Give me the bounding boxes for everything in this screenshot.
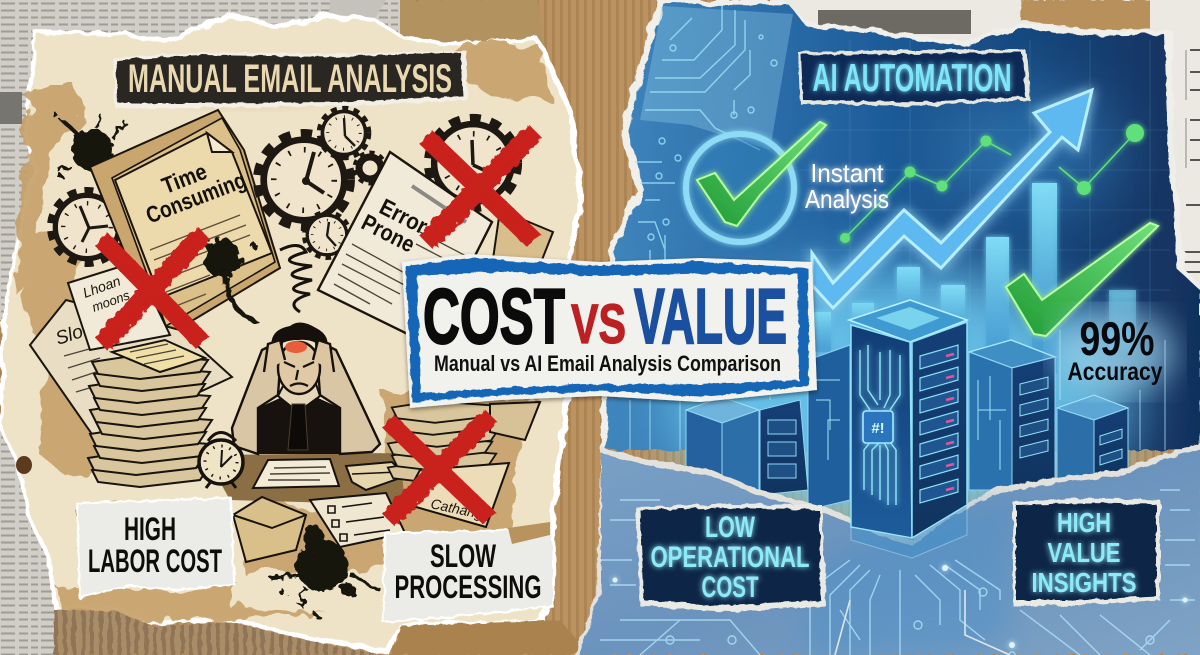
panel: ai upper background xyxy=(600,0,1200,530)
rack rows xyxy=(920,345,958,503)
label: high value insights: VALUE xyxy=(1048,537,1120,568)
panel: manual paper xyxy=(0,12,584,655)
desk paper xyxy=(253,459,339,488)
plastic sheet xyxy=(640,6,793,150)
label: low operational cost: OPERATIONAL xyxy=(650,541,810,574)
tape on high labor cost xyxy=(75,500,118,522)
background light streaks xyxy=(630,330,1165,450)
headache mark xyxy=(285,341,307,353)
stat: 99% accuracy: 99% xyxy=(1080,312,1154,365)
shirt and arms xyxy=(232,340,282,454)
ink splat bottom xyxy=(270,524,380,620)
ink splat on document xyxy=(202,237,257,322)
document text: Time xyxy=(158,158,210,199)
chip xyxy=(860,345,900,505)
label: low operational cost: LOW xyxy=(705,511,755,544)
document: Error Prone xyxy=(318,152,553,345)
label: high labor cost: LABOR COST xyxy=(88,543,222,579)
document: handwritten note xyxy=(68,262,170,350)
lower clock xyxy=(304,212,350,258)
bottom corrugated cardboard edge xyxy=(54,610,382,655)
stressed man xyxy=(232,322,380,454)
label: ai automation: AI AUTOMATION xyxy=(812,57,1012,100)
label: manual email analysis xyxy=(113,50,468,108)
label: slow processing: PROCESSING xyxy=(394,569,542,605)
face xyxy=(278,342,320,394)
hair xyxy=(271,322,328,352)
server: far right xyxy=(1057,395,1128,480)
server: right xyxy=(969,340,1055,490)
spring doodle xyxy=(280,245,312,312)
ink splat top xyxy=(52,112,126,178)
green check large xyxy=(1006,223,1158,336)
label: high labor cost: HIGH xyxy=(124,511,176,547)
green line graph xyxy=(840,124,1144,243)
server: center xyxy=(849,300,967,558)
bar chart xyxy=(811,183,1136,373)
collar xyxy=(278,384,320,412)
desk xyxy=(205,453,405,505)
top small clock xyxy=(319,108,369,158)
growth arrow xyxy=(812,90,1092,308)
document text xyxy=(358,189,432,259)
text: instant analysis: Analysis xyxy=(805,184,889,214)
title text: VALUE xyxy=(634,272,787,360)
document: handwritten note: Lhoan xyxy=(81,272,123,301)
tie xyxy=(288,404,308,450)
document text: Consuming xyxy=(142,167,250,228)
chip: #! xyxy=(871,420,885,437)
left clock xyxy=(51,191,123,263)
alarm clock xyxy=(199,432,243,488)
coffee stains xyxy=(14,46,550,622)
label: ai automation xyxy=(798,50,1030,106)
right clock xyxy=(429,119,517,207)
panel: ai lower background xyxy=(575,443,1200,655)
label: high labor cost xyxy=(77,498,234,598)
vest xyxy=(258,398,340,454)
label: low operational cost: COST xyxy=(702,571,758,604)
rolled document xyxy=(490,402,540,440)
document: handwritten note: moons xyxy=(90,287,132,315)
envelope xyxy=(233,497,306,562)
text: instant analysis: Instant xyxy=(810,158,884,188)
small paper stack xyxy=(346,462,406,490)
red x left xyxy=(102,234,205,344)
left paper stack xyxy=(88,340,212,487)
check circle icon xyxy=(686,122,826,242)
checklist document xyxy=(310,493,405,547)
right paper stack xyxy=(388,401,498,483)
circuit traces xyxy=(600,490,1195,655)
label: slow processing xyxy=(383,522,553,622)
slow document: Slow xyxy=(53,317,100,350)
big clock xyxy=(258,134,350,226)
stat: 99% accuracy xyxy=(1055,310,1175,394)
title card xyxy=(402,254,817,408)
text: instant analysis xyxy=(805,158,889,214)
title text xyxy=(423,272,787,360)
document text: Prone xyxy=(358,209,419,257)
label: low operational cost xyxy=(636,504,826,612)
label: high value insights xyxy=(1013,498,1160,606)
document: signature note: Cathang xyxy=(429,495,485,522)
title text: VS xyxy=(571,292,626,355)
red x top right xyxy=(427,132,537,242)
document: signature note xyxy=(402,463,509,527)
server: far left xyxy=(686,397,759,500)
server: left xyxy=(760,345,850,510)
top left newspaper xyxy=(0,0,400,60)
small gear xyxy=(355,153,385,183)
document text xyxy=(134,146,250,228)
label: high value insights: HIGH xyxy=(1057,507,1111,538)
top right newspaper xyxy=(770,0,1200,60)
hands xyxy=(264,340,334,372)
document text: Error xyxy=(376,193,432,239)
torn sheet fold xyxy=(835,590,1010,655)
grid xyxy=(800,40,1170,320)
circuit traces xyxy=(635,6,777,265)
left newspaper strip xyxy=(0,0,60,655)
green check xyxy=(697,122,826,226)
label: manual email analysis: MANUAL EMAIL ANALYSIS xyxy=(128,57,452,101)
document: Time Consuming xyxy=(90,110,280,340)
bottom cardboard patch xyxy=(390,620,590,655)
subtitle: Manual vs AI Email Analysis Comparison xyxy=(434,351,781,376)
title text: COST xyxy=(423,272,565,360)
upper tan cardboard piece xyxy=(370,0,545,48)
stat: 99% accuracy: Accuracy xyxy=(1068,358,1163,386)
label: slow processing: SLOW xyxy=(430,538,497,574)
label: high value insights: INSIGHTS xyxy=(1032,567,1136,598)
slow document xyxy=(30,300,232,440)
red x bottom right xyxy=(389,416,492,520)
right newspaper strip xyxy=(1150,0,1200,320)
